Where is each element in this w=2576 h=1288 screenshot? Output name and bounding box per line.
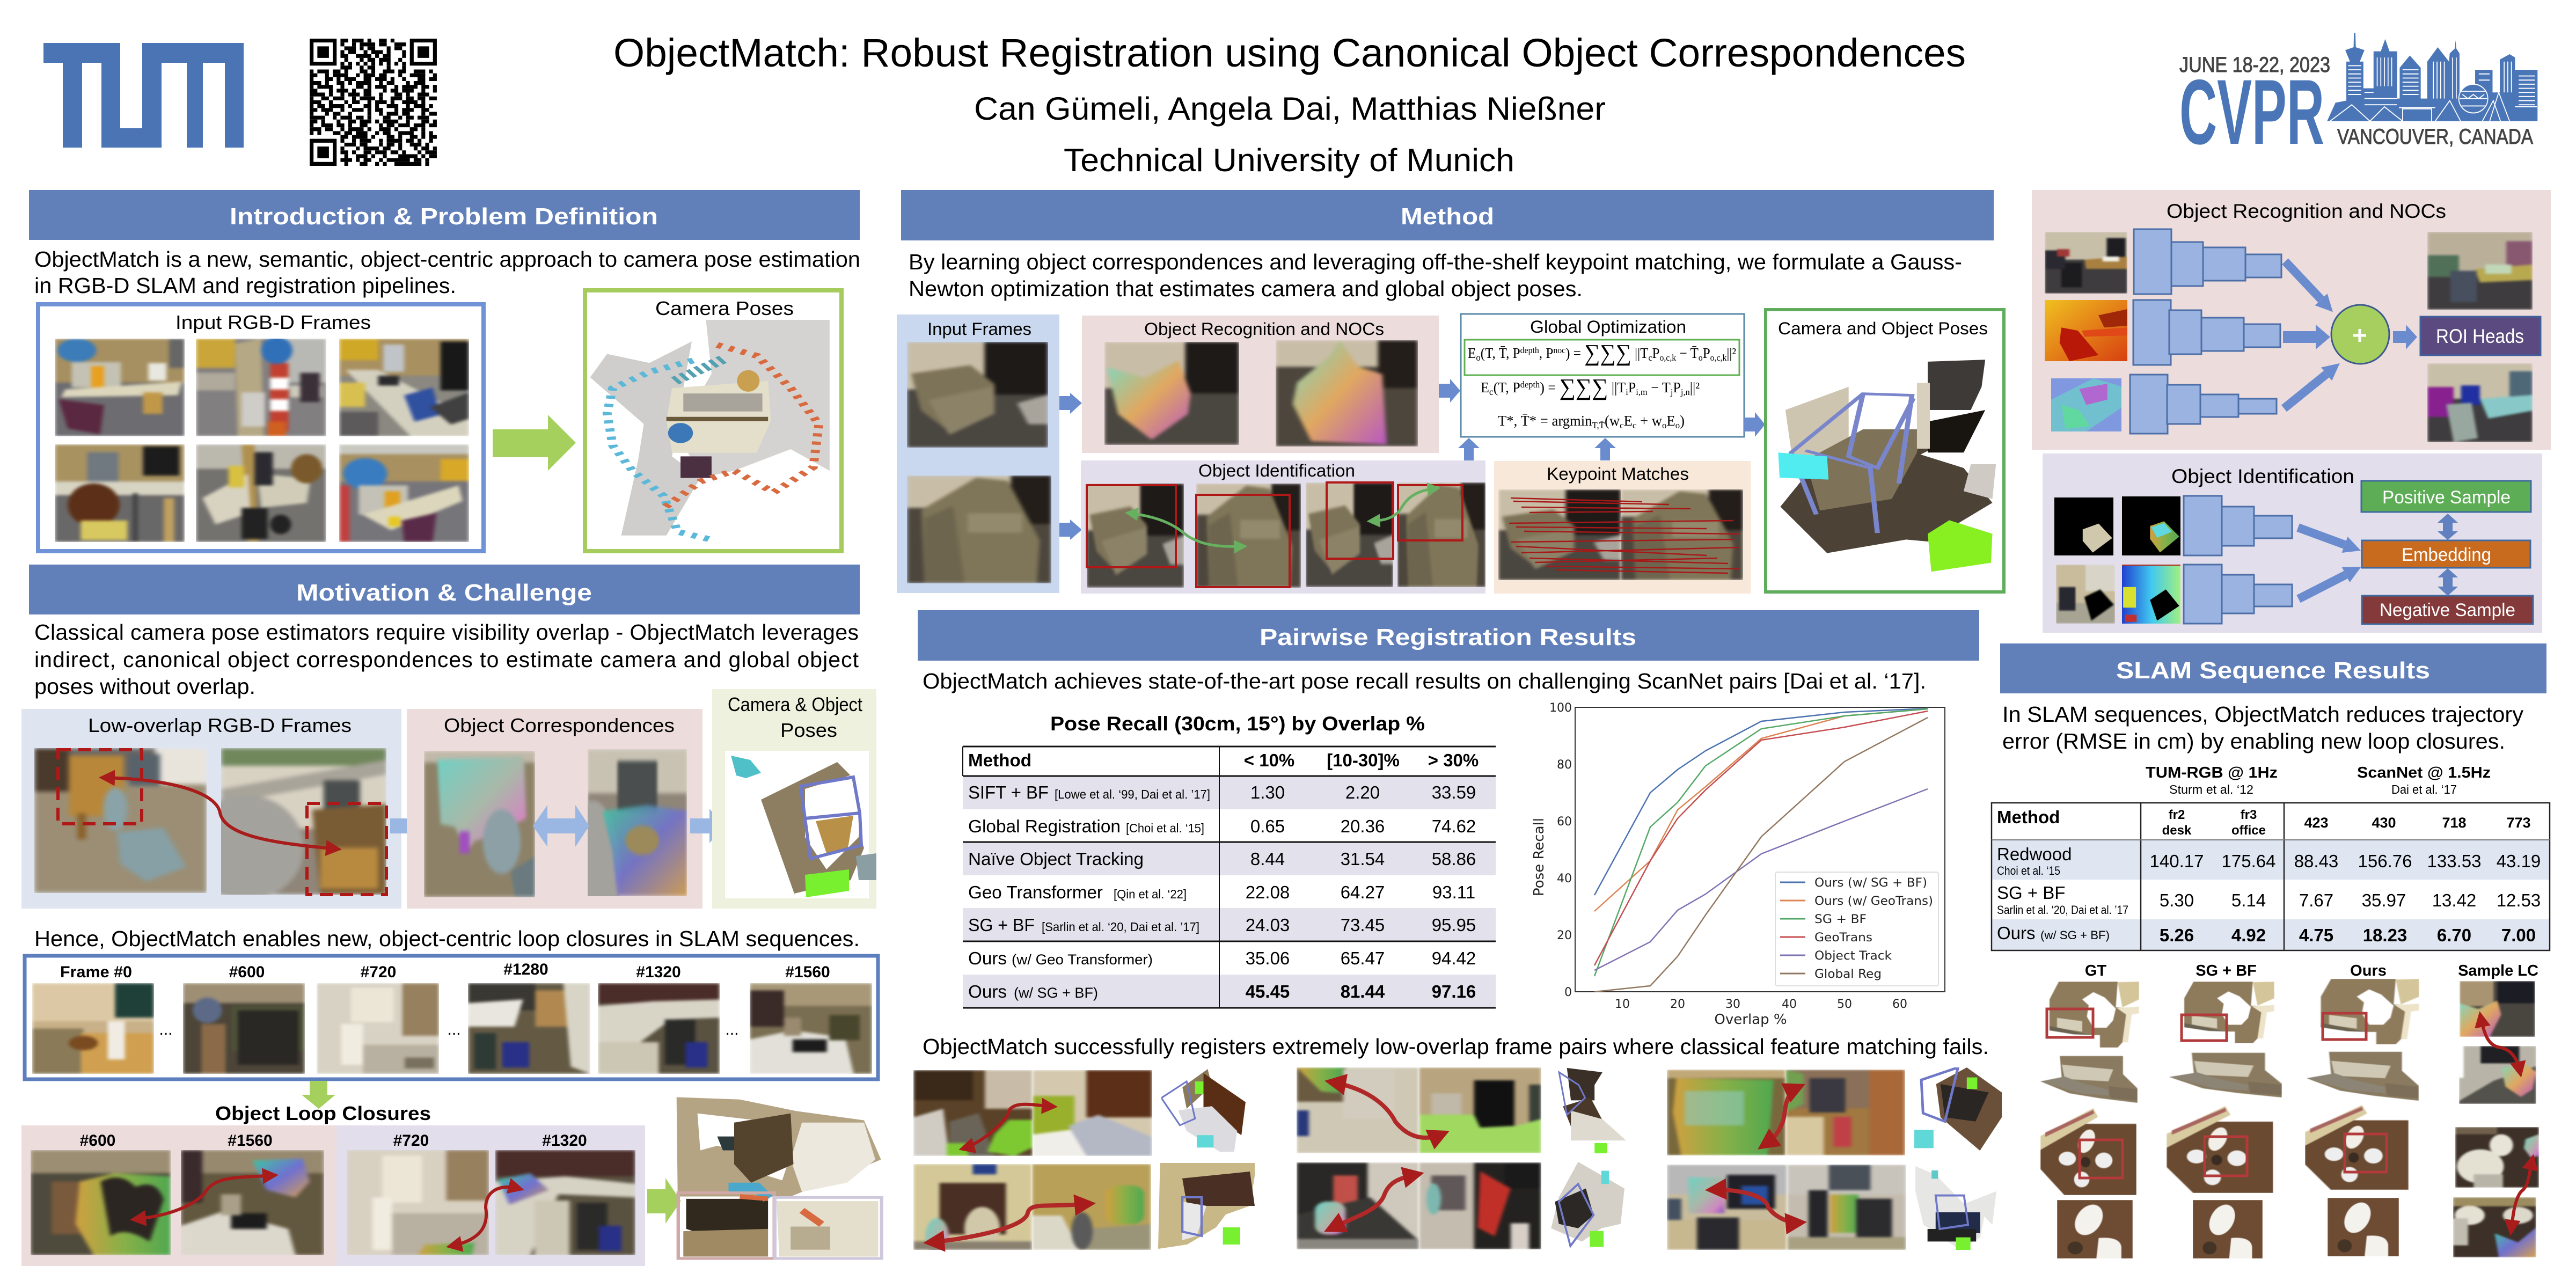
qualitative results: pair 2: [1297, 1067, 1626, 1153]
panel: object recognition and NOCs (right): Object Recognition and NOCs: [2167, 200, 2446, 222]
panel: global optimization: ) =: [1540, 379, 1560, 396]
panel: global optimization: i: [1626, 387, 1628, 397]
table: pose recall: 97.16: [1432, 982, 1476, 1001]
panel: global optimization: − T: [1648, 379, 1671, 396]
legend: SG + BF: [1814, 913, 1867, 926]
panel: frame sequence: #720: [361, 963, 396, 981]
panel: loop closure purple: [336, 1125, 645, 1266]
table: pose recall: SG + BF: [968, 915, 1035, 935]
panel: camera and object poses: Camera and Object Poses: [1778, 319, 1988, 338]
object crops: [2054, 497, 2113, 555]
table: pose recall: SIFT + BF: [968, 782, 1049, 802]
panel: keypoint matches: [1494, 461, 1751, 594]
reconstruction comparison: [2040, 979, 2419, 1258]
panel: global optimization: ): [1680, 413, 1685, 429]
panel: frame sequence: #1320: [636, 963, 681, 981]
panel: global optimization: [1461, 314, 1744, 437]
panel: object recognition and NOCs: [1082, 316, 1439, 453]
panel: global optimization: j,n: [1680, 387, 1690, 397]
motivation text: Classical camera pose estimators require visibility overlap - ObjectMatch leverages: [34, 620, 859, 645]
table: SLAM RMSE: 773: [2506, 815, 2531, 831]
table: pose recall: 58.86: [1432, 849, 1476, 869]
match arrows: [1129, 488, 1437, 546]
line chart: pose recall vs overlap: Pose Recall: [1531, 818, 1547, 896]
panel: camera and object poses: Camera & Object: [728, 693, 862, 715]
table: pose recall: [Qin et al. ‘22]: [1114, 887, 1187, 901]
reconstruction with room highlights: [677, 1097, 882, 1259]
panel: frame sequence: [25, 956, 878, 1079]
table: SLAM RMSE: Sarlin et al. ‘20, Dai et al. ’17: [1997, 903, 2128, 917]
table: pose recall: [10-30]%: [1327, 750, 1400, 770]
negative sample: Negative Sample: [2380, 600, 2515, 620]
logo: CVPR 2023 Vancouver: VANCOUVER, CANADA: [2337, 125, 2533, 149]
table: pose recall: 0.65: [1250, 816, 1285, 836]
embedding: [2362, 540, 2530, 568]
panel: global optimization: (w: [1605, 413, 1620, 429]
line chart: pose recall vs overlap: 80: [1557, 758, 1572, 772]
panel: object recognition and NOCs: Object Recognition and NOCs: [1144, 319, 1384, 339]
legend: Object Track: [1814, 949, 1892, 963]
table: pose recall: 45.45: [1246, 982, 1290, 1001]
panel: camera and object poses: [1766, 310, 2004, 592]
table: SLAM RMSE: 13.42: [2432, 890, 2476, 910]
arrow: [390, 809, 424, 843]
SLAM text: [2002, 702, 2523, 753]
table title: Pose Recall (30cm, 15°) by Overlap %: [1050, 713, 1425, 735]
panel: input frames: [897, 314, 1059, 593]
line chart: pose recall vs overlap: 60: [1892, 998, 1907, 1011]
panel: global optimization: c: [1489, 386, 1494, 397]
table: pose recall: < 10%: [1244, 750, 1294, 770]
panel: object identification (right): Object Identification: [2171, 465, 2354, 487]
header bar: [2000, 643, 2546, 693]
section: motivation: [21, 565, 882, 1266]
table: pose recall: 8.44: [1250, 849, 1285, 869]
column labels: GT: [2085, 962, 2106, 979]
panel: low-overlap frames: [21, 709, 401, 909]
method text: Newton optimization that estimates camera and global object poses.: [909, 276, 1583, 301]
table: pose recall: 95.95: [1432, 915, 1476, 935]
legend: GeoTrans: [1814, 931, 1872, 945]
header bar: Method: [1401, 203, 1494, 230]
LC arrows: [2480, 1016, 2533, 1231]
table: SLAM RMSE: fr2: [2169, 808, 2185, 822]
line chart: pose recall vs overlap: [1531, 701, 1945, 1028]
table group headings: Dai et al. ‘17: [2391, 782, 2457, 796]
panel: global optimization: ||²: [1690, 379, 1700, 396]
panel: global optimization: + w: [1636, 413, 1663, 429]
logo: TUM: [43, 43, 244, 148]
panel: input frames: Input Frames: [927, 319, 1031, 339]
column labels: Ours: [2350, 962, 2387, 979]
sum node: [2331, 305, 2389, 364]
panel: object recognition and NOCs (right): [2032, 190, 2551, 450]
panel: global optimization: E: [1468, 345, 1477, 361]
line chart: pose recall vs overlap: 20: [1557, 929, 1572, 942]
panel: global optimization: T,T̄: [1592, 420, 1605, 430]
table: SLAM RMSE: 175.64: [2222, 851, 2275, 871]
table: SLAM RMSE: 140.17: [2150, 851, 2204, 871]
logo: CVPR 2023 Vancouver: [2179, 33, 2537, 164]
table: pose recall: [Lowe et al. ‘99, Dai et al. ’17]: [1055, 787, 1210, 801]
table: SLAM RMSE: 7.00: [2501, 925, 2536, 945]
panel: global optimization: ∑∑∑: [1584, 340, 1631, 366]
table: SLAM RMSE: 6.70: [2437, 925, 2471, 945]
positive sample: Positive Sample: [2382, 487, 2511, 508]
heading: object loop closures: Object Loop Closures: [215, 1102, 431, 1124]
table: SLAM RMSE: 5.30: [2160, 890, 2194, 910]
panel: global optimization: o: [1675, 420, 1680, 430]
header bar: [29, 190, 860, 240]
panel: camera and object poses: [712, 689, 876, 909]
line chart: pose recall vs overlap: 40: [1557, 872, 1572, 885]
column labels: [2085, 962, 2538, 979]
panel: global optimization: , P: [1539, 345, 1553, 361]
table: pose recall: [Sarlin et al. ‘20, Dai et al. ’17]: [1042, 920, 1199, 934]
panel: global optimization: E: [1624, 413, 1633, 429]
panel: frame sequence: Frame #0: [60, 963, 132, 981]
intro text: ObjectMatch is a new, semantic, object-centric approach to camera pose estimation: [34, 247, 860, 272]
ellipsis: [159, 1021, 739, 1038]
loop closure sentence: Hence, ObjectMatch enables new, object-centric loop closures in SLAM sequences.: [34, 926, 860, 951]
table: pose recall: 2.20: [1345, 782, 1380, 802]
panel: global optimization: ||T: [1631, 345, 1649, 361]
panel: global optimization: depth: [1520, 345, 1539, 355]
panel: global optimization: o,c,k: [1659, 353, 1677, 363]
legend: [1775, 872, 1938, 986]
panel: global optimization: o,c,k: [1710, 353, 1727, 363]
header bar: [918, 610, 1979, 661]
panel: frame sequence: #600: [229, 963, 265, 981]
table: SLAM RMSE: Ours: [1997, 923, 2036, 943]
table group headings: Sturm et al. ‘12: [2169, 782, 2253, 796]
affiliation: Technical University of Munich: [1064, 142, 1514, 178]
line chart: pose recall vs overlap: 20: [1670, 998, 1685, 1011]
normal image: [2051, 378, 2121, 431]
section: pairwise results: [913, 610, 2002, 1256]
table: SLAM RMSE: 423: [2304, 815, 2329, 831]
panel: global optimization: ||T: [1608, 379, 1626, 396]
table: pose recall: 24.03: [1246, 915, 1290, 935]
output: instance grid: [2427, 232, 2533, 310]
authors: Can Gümeli, Angela Dai, Matthias Nießner: [974, 91, 1606, 127]
panel: loop closure purple: #720: [393, 1132, 429, 1150]
embedding: Embedding: [2402, 545, 2491, 565]
table: pose recall: 81.44: [1341, 982, 1385, 1001]
panel: object identification (right): [2043, 453, 2542, 633]
panel: global optimization: P: [1628, 379, 1636, 396]
table: SLAM RMSE: Method: [1997, 807, 2060, 827]
QR code: [310, 41, 437, 164]
column labels: SG + BF: [2196, 962, 2257, 979]
loop arrow: [135, 1175, 274, 1219]
table: pose recall: 64.27: [1341, 882, 1385, 902]
table: SLAM RMSE: 5.26: [2160, 925, 2194, 945]
panel: global optimization: − T̄: [1676, 345, 1699, 361]
correspondence arrow: [104, 778, 337, 849]
arrow: down to loop closures: [302, 1081, 335, 1109]
header bar: Introduction & Problem Definition: [230, 203, 658, 230]
panel: loop closure pink: [21, 1125, 336, 1266]
header bar: Motivation & Challenge: [296, 580, 592, 606]
table: SLAM RMSE: 7.67: [2299, 890, 2333, 910]
table: SLAM RMSE: fr3: [2241, 808, 2257, 822]
table: SLAM RMSE: office: [2231, 823, 2266, 838]
panel: global optimization: ∑∑∑: [1560, 374, 1608, 400]
table: pose recall: Method: [968, 750, 1031, 770]
double arrows: [2438, 514, 2458, 596]
logo: CVPR 2023 Vancouver: JUNE 18-22, 2023: [2179, 53, 2330, 77]
table: pose recall: 20.36: [1341, 816, 1385, 836]
highlight boxes: [2047, 1009, 2387, 1178]
table: pose recall: Geo Transformer: [968, 882, 1103, 902]
legend: Ours (w/ SG + BF): [1814, 876, 1927, 890]
panel: global optimization: depth: [1520, 379, 1540, 390]
panel: global optimization: o: [1699, 353, 1703, 363]
qualitative results: pair 4: [913, 1163, 1255, 1256]
table: pose recall: 73.45: [1341, 915, 1385, 935]
input RGB image: [2045, 232, 2127, 294]
table: SLAM RMSE: 18.23: [2363, 925, 2407, 945]
legend: Ours (w/ GeoTrans): [1814, 895, 1933, 908]
panel: global optimization: o: [1662, 420, 1666, 430]
table: SLAM RMSE: 43.19: [2497, 851, 2541, 871]
panel: frame sequence: #1560: [785, 963, 830, 981]
positive sample: [2361, 481, 2531, 512]
table: pose recall: (w/ Geo Transformer): [1012, 952, 1153, 968]
table: SLAM RMSE: (w/ SG + BF): [2040, 928, 2110, 942]
table: pose recall: 31.54: [1341, 849, 1385, 869]
table: SLAM RMSE: Redwood: [1997, 844, 2072, 864]
panel: frame sequence: #1280: [503, 961, 548, 978]
table: pose recall: Naïve Object Tracking: [968, 849, 1144, 869]
line chart: pose recall vs overlap: 50: [1837, 998, 1852, 1011]
arrow: to camera poses: [493, 415, 576, 471]
table: SLAM RMSE: 430: [2372, 815, 2396, 831]
table: SLAM RMSE: desk: [2162, 823, 2192, 838]
panel: camera and object poses: Poses: [780, 719, 837, 741]
motivation text: indirect, canonical object correspondences to estimate camera and global object: [34, 647, 859, 672]
table: SLAM RMSE: 88.43: [2294, 851, 2338, 871]
panel: global optimization: P: [1703, 345, 1710, 361]
panel: global optimization: c: [1633, 420, 1637, 430]
table: SLAM RMSE: 12.53: [2497, 890, 2541, 910]
title: ObjectMatch: Robust Registration using Canonical Object Correspondences: [613, 31, 1966, 75]
arrows into sum: [2284, 261, 2326, 408]
table: SLAM RMSE: 133.53: [2427, 851, 2481, 871]
table: pose recall: Global Registration: [968, 816, 1121, 836]
panel: object identification: [1081, 460, 1485, 594]
panel: global optimization: P: [1652, 345, 1659, 361]
ellipsis: ...: [725, 1021, 739, 1038]
method text: By learning object correspondences and leveraging off-the-shelf keypoint matching, we formulate a Gauss-: [909, 250, 1962, 274]
panel: low-overlap frames: Low-overlap RGB-D Frames: [88, 714, 352, 736]
panel: keypoint matches: Keypoint Matches: [1547, 464, 1689, 484]
loop arrow: [451, 1187, 519, 1246]
section: introduction: [29, 190, 860, 551]
table: pose recall: 94.42: [1432, 948, 1476, 968]
table group headings: ScanNet @ 1.5Hz: [2357, 764, 2491, 781]
panel: global optimization: E: [1481, 379, 1490, 396]
table: SLAM RMSE: 718: [2442, 815, 2467, 831]
panel: global optimization: noc: [1553, 345, 1566, 355]
header bar: [29, 565, 860, 614]
ellipsis: ...: [447, 1021, 461, 1038]
table group headings: TUM-RGB @ 1Hz: [2146, 764, 2278, 781]
panel: global optimization: E: [1666, 413, 1675, 429]
table: pose recall: Ours: [968, 948, 1007, 968]
panel: global optimization: ||²: [1726, 345, 1736, 361]
double arrow: [533, 805, 589, 847]
output: NOC render: [2427, 363, 2533, 442]
negative sample: [2362, 596, 2533, 624]
panel: loop closure pink: #600: [80, 1132, 115, 1150]
line chart: pose recall vs overlap: 100: [1549, 701, 1572, 715]
sample loop closures: [2453, 981, 2539, 1257]
line chart: pose recall vs overlap: Overlap %: [1714, 1012, 1787, 1028]
panel: global optimization: Global Optimization: [1530, 317, 1686, 336]
header bar: SLAM Sequence Results: [2116, 657, 2430, 684]
panel: camera poses: [585, 290, 841, 551]
motivation text: poses without overlap.: [34, 674, 255, 699]
panel: object identification: Object Identification: [1198, 461, 1355, 480]
ROI heads box: ROI Heads: [2436, 325, 2524, 347]
arrow: [690, 809, 724, 843]
header bar: [901, 190, 1994, 240]
encoder blocks: [2130, 229, 2281, 434]
logo: CVPR 2023 Vancouver: CVPR: [2179, 61, 2324, 164]
intro text: [34, 247, 860, 298]
panel: global optimization: c: [1648, 353, 1652, 363]
arrows to embedding: [2298, 528, 2346, 599]
panel: loop closure pink: #1560: [228, 1132, 273, 1150]
panel: global optimization: (T, T̄, P: [1481, 345, 1520, 361]
motivation text: [34, 620, 859, 699]
table: pose recall: [963, 747, 1496, 1008]
arrow: [647, 1178, 681, 1224]
header bar: Pairwise Registration Results: [1260, 624, 1636, 650]
legend: Global Reg: [1814, 968, 1882, 981]
table: SLAM RMSE: Choi et al. ‘15: [1997, 864, 2060, 877]
section: method: [897, 190, 2004, 594]
panel: loop closure purple: #1320: [542, 1132, 587, 1150]
qualitative results: pair 3: [1667, 1067, 2002, 1155]
results text: ObjectMatch achieves state-of-the-art pose recall results on challenging ScanNet pairs [Dai et al. ‘17].: [923, 669, 1926, 693]
section: SLAM results: [1992, 643, 2550, 1258]
SLAM text: In SLAM sequences, ObjectMatch reduces trajectory: [2002, 702, 2523, 727]
panel: global optimization: T*, T̄* = argmin: [1498, 413, 1593, 429]
panel: global optimization: j: [1670, 387, 1673, 397]
panel: global optimization: i,m: [1636, 387, 1648, 397]
qualitative sentence: ObjectMatch successfully registers extremely low-overlap frame pairs where classical feature matching fails.: [923, 1034, 1989, 1059]
column labels: Sample LC: [2458, 962, 2538, 979]
table: pose recall: Ours: [968, 982, 1007, 1001]
ellipsis: ...: [159, 1021, 173, 1038]
table: pose recall: 35.06: [1246, 948, 1290, 968]
line chart: pose recall vs overlap: 30: [1725, 998, 1740, 1011]
panel: object correspondences: [407, 709, 702, 948]
table: SLAM RMSE: 35.97: [2362, 890, 2406, 910]
table: pose recall: (w/ SG + BF): [1014, 985, 1098, 1001]
panel: input RGB-D frames: [38, 304, 484, 551]
table group headings: [2146, 764, 2491, 796]
encoder blocks: [2184, 496, 2292, 624]
panel: input RGB-D frames: Input RGB-D Frames: [175, 311, 371, 333]
panel: camera poses: Camera Poses: [655, 297, 794, 319]
table: pose recall: 22.08: [1246, 882, 1290, 902]
intro text: in RGB-D SLAM and registration pipelines.: [34, 273, 456, 298]
table: pose recall: > 30%: [1428, 750, 1479, 770]
line chart: pose recall vs overlap: 0: [1564, 986, 1572, 999]
panel: global optimization: ) =: [1565, 345, 1584, 361]
arrows into and out of optimization: [1439, 379, 1765, 460]
panel: global optimization: c: [1620, 420, 1624, 430]
table: pose recall: 74.62: [1432, 816, 1476, 836]
qualitative results: pair 6: [1667, 1165, 1996, 1250]
table: SLAM RMSE: 156.76: [2358, 851, 2412, 871]
bounding boxes: [1087, 482, 1462, 587]
table: pose recall: 93.11: [1432, 882, 1475, 902]
table: SLAM RMSE: 5.14: [2231, 890, 2266, 910]
panel: global optimization: o: [1476, 352, 1481, 363]
depth image: [2045, 300, 2127, 361]
table: pose recall: [Choi et al. ‘15]: [1126, 821, 1204, 835]
line chart: pose recall vs overlap: 40: [1782, 998, 1797, 1011]
method text: [909, 250, 1962, 301]
table: SLAM RMSE: [1992, 803, 2550, 950]
qualitative results: pair 5: [1297, 1162, 1624, 1249]
line chart: pose recall vs overlap: 60: [1557, 815, 1572, 829]
line chart: pose recall vs overlap: 10: [1615, 998, 1630, 1011]
table: SLAM RMSE: 4.92: [2231, 925, 2266, 945]
table: pose recall: 33.59: [1432, 782, 1476, 802]
ROI heads box: [2420, 317, 2541, 355]
panel: global optimization: P: [1673, 379, 1681, 396]
table: SLAM RMSE: 4.75: [2299, 925, 2333, 945]
SLAM text: error (RMSE in cm) by enabling new loop closures.: [2002, 729, 2505, 753]
table: pose recall: 1.30: [1250, 782, 1285, 802]
arrows: input to modules: [1059, 393, 1082, 540]
table: SLAM RMSE: SG + BF: [1997, 883, 2065, 903]
table: pose recall: 65.47: [1341, 948, 1385, 968]
qualitative results: pair 1: [913, 1069, 1246, 1160]
panel: object correspondences: Object Correspondences: [444, 714, 675, 736]
panel: global optimization: (T, P: [1494, 379, 1520, 396]
dashed highlight rectangles: [58, 750, 386, 895]
